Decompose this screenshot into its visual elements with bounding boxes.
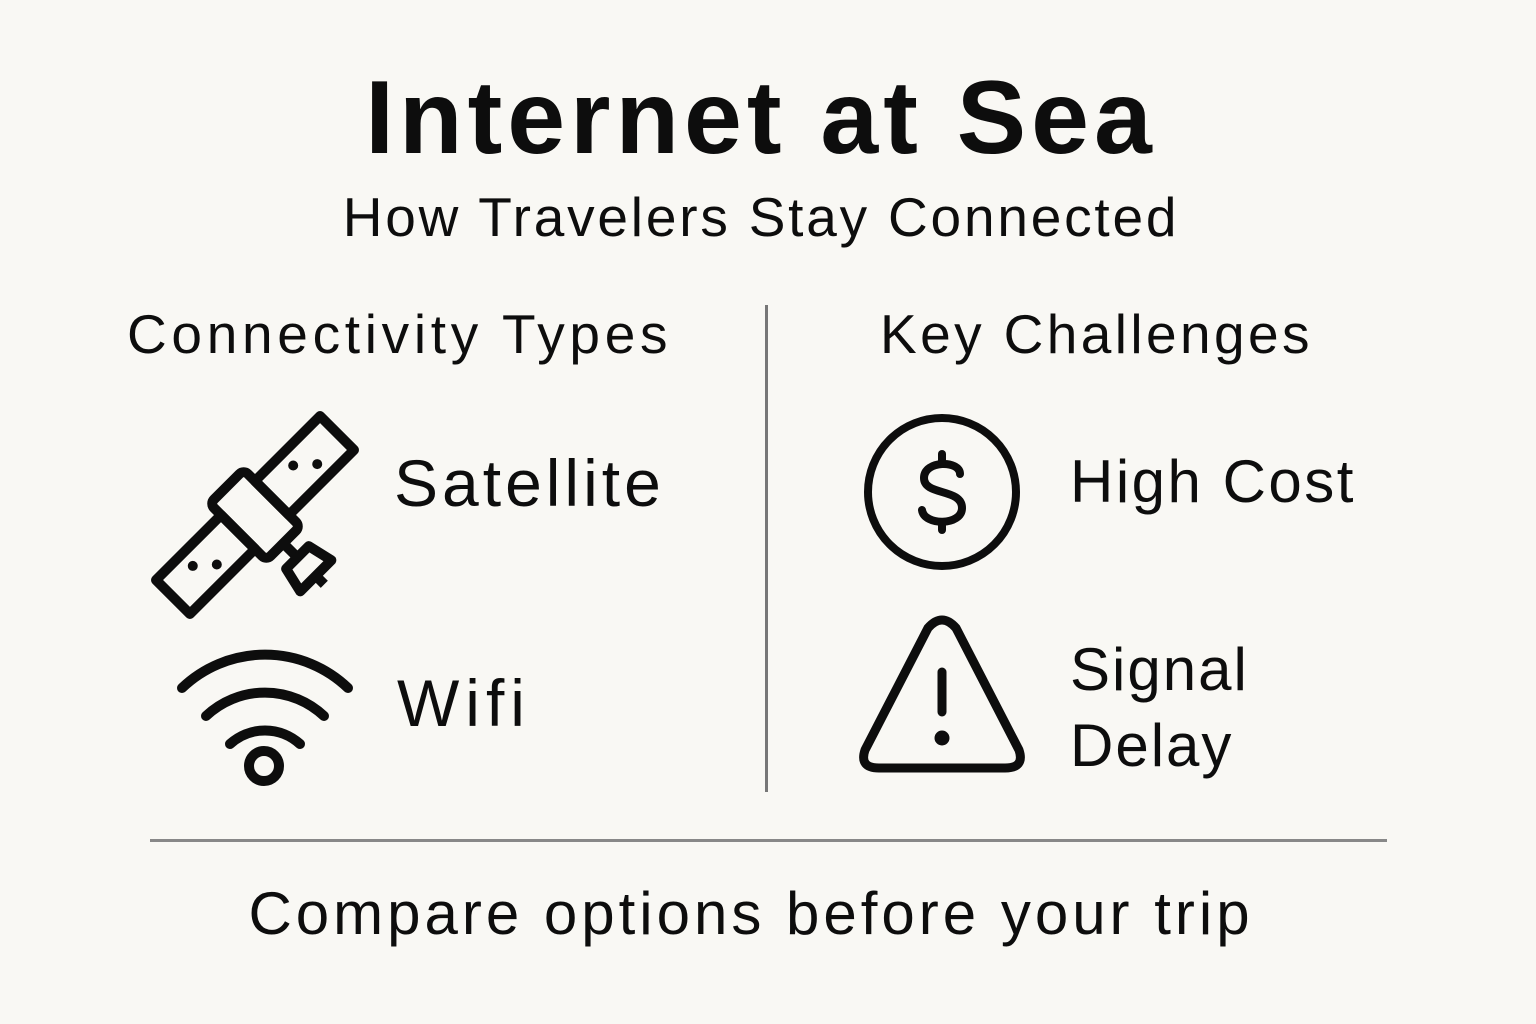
heading: key challenges: Key Challenges (880, 303, 1313, 365)
label: satellite: Satellite (394, 446, 665, 520)
label: high cost: High Cost (1070, 448, 1356, 515)
vertical divider (765, 305, 768, 792)
label: signal delay: Delay (1070, 712, 1233, 779)
icon: warning (859, 616, 1025, 772)
subtitle: How Travelers Stay Connected (343, 186, 1179, 248)
footer text: Compare options before your trip (248, 880, 1254, 947)
label: wifi: Wifi (397, 666, 531, 740)
heading: connectivity types: Connectivity Types (127, 303, 672, 365)
title: Internet at Sea (365, 60, 1157, 176)
horizontal divider (150, 839, 1387, 842)
label: signal delay (1070, 636, 1249, 779)
icon: dollar (864, 414, 1020, 570)
label: signal delay: Signal (1070, 636, 1249, 703)
icon: wifi (177, 650, 353, 786)
